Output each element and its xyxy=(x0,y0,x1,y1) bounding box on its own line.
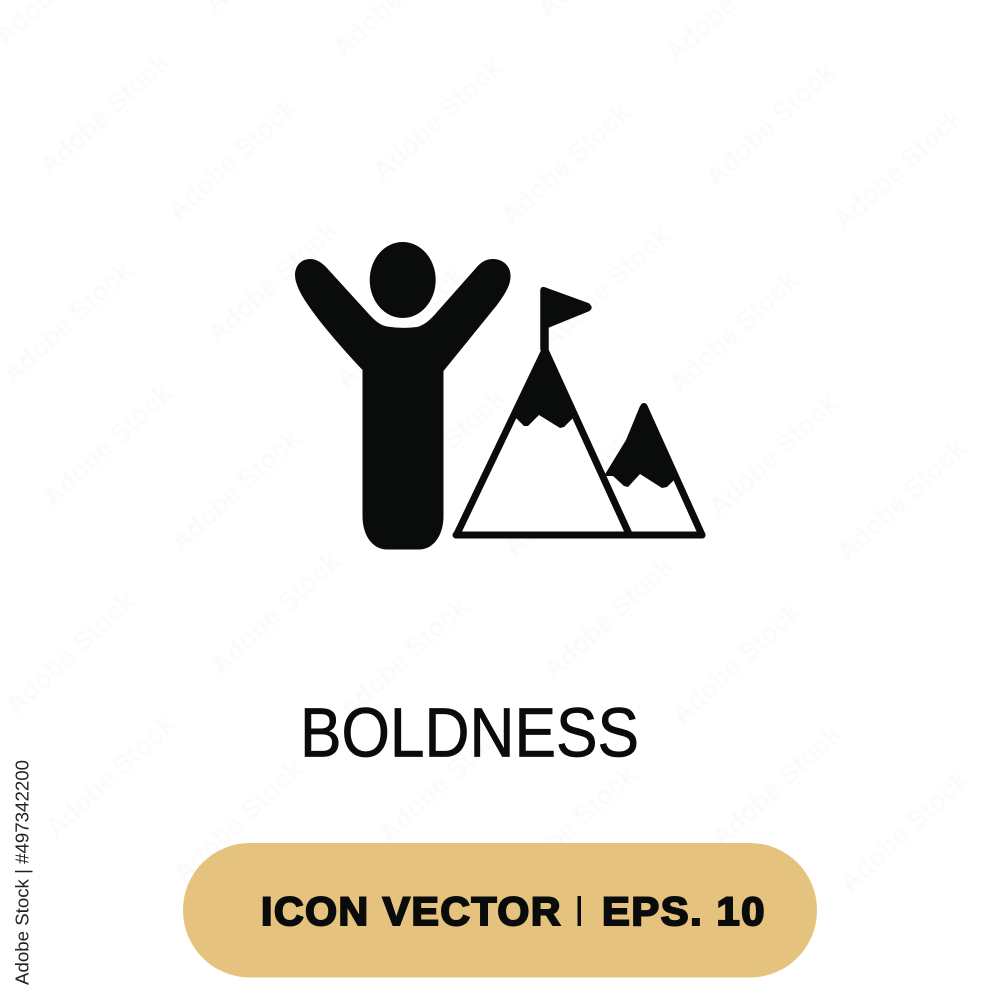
large mountain xyxy=(456,347,630,535)
faint diagonal stock watermarks: Adobe Stock xyxy=(706,718,847,853)
badge text: EPS. 10: EPS. 10 xyxy=(602,890,766,934)
faint diagonal stock watermarks: Adobe Stock xyxy=(205,545,346,680)
faint diagonal stock watermarks: Adobe Stock xyxy=(330,259,471,394)
icon: mountains with flag xyxy=(456,287,702,535)
faint diagonal stock watermarks: Adobe Stock xyxy=(501,758,642,893)
faint diagonal stock watermarks: Adobe Stock xyxy=(828,101,969,236)
icon: person with raised arms xyxy=(295,242,511,550)
faint diagonal stock watermarks: Adobe Stock xyxy=(498,427,639,562)
faint diagonal stock watermarks: Adobe Stock xyxy=(700,56,841,191)
pill badge xyxy=(183,843,817,978)
faint diagonal stock watermarks: Adobe Stock xyxy=(535,219,676,354)
faint diagonal stock watermarks: Adobe Stock xyxy=(666,595,807,730)
faint diagonal stock watermarks: Adobe Stock xyxy=(168,753,309,888)
faint diagonal stock watermarks: Adobe Stock xyxy=(663,264,804,399)
faint diagonal stock watermarks: Adobe Stock xyxy=(333,590,474,725)
faint diagonal stock watermarks: Adobe Stock xyxy=(34,46,175,181)
faint diagonal stock watermarks: Adobe Stock xyxy=(373,713,514,848)
faint diagonal stock watermarks: Adobe Stock xyxy=(495,96,636,231)
faint diagonal stock watermarks: Adobe Stock xyxy=(37,377,178,512)
faint diagonal stock watermarks: Adobe Stock xyxy=(831,432,972,567)
badge text: pipe separator xyxy=(578,896,581,926)
faint diagonal stock watermarks: Adobe Stock xyxy=(367,51,508,186)
faint diagonal stock watermarks: Adobe Stock xyxy=(0,254,138,389)
faint diagonal stock watermarks: Adobe Stock xyxy=(370,382,511,517)
heading: BOLDNESS: BOLDNESS xyxy=(300,694,639,772)
faint diagonal stock watermarks: Adobe Stock xyxy=(162,91,303,226)
flag xyxy=(540,287,592,350)
badge text: ICON VECTOR: ICON VECTOR xyxy=(261,890,562,934)
faint diagonal stock watermarks: Adobe Stock xyxy=(202,214,343,349)
faint diagonal stock watermarks: Adobe Stock xyxy=(538,550,679,685)
vertical stock credit: Adobe Stock | #497342200 xyxy=(12,760,32,985)
faint diagonal stock watermarks: Adobe Stock xyxy=(40,708,181,843)
small mountain xyxy=(600,403,702,535)
faint diagonal stock watermarks: Adobe Stock xyxy=(0,585,141,720)
base line xyxy=(456,532,702,538)
faint diagonal stock watermarks: Adobe Stock xyxy=(165,422,306,557)
faint diagonal stock watermarks: Adobe Stock xyxy=(703,387,844,522)
faint diagonal stock watermarks: Adobe Stock xyxy=(834,763,975,898)
